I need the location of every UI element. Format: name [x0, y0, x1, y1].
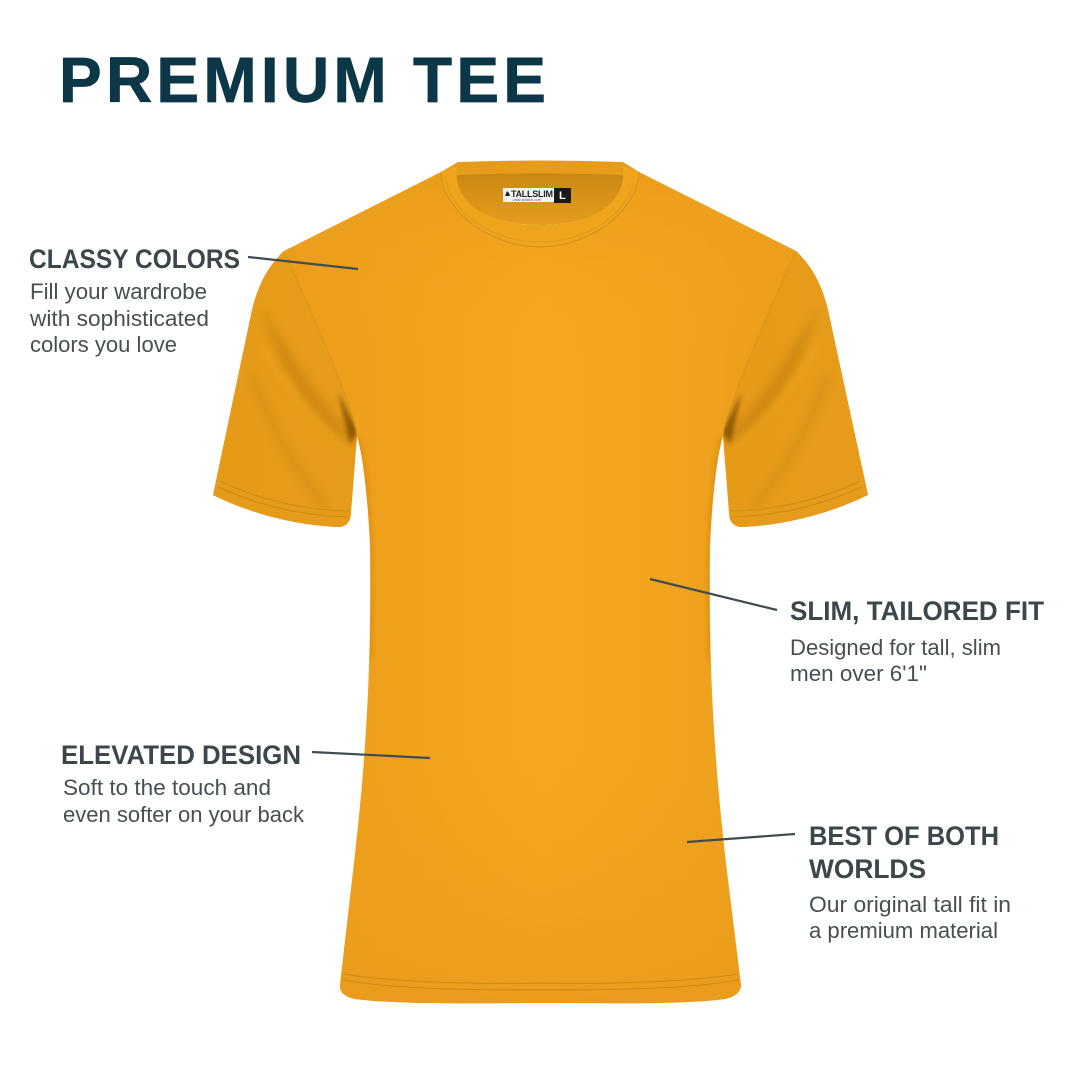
callout: slim, tailored fit — [650, 579, 1044, 686]
heading: elevated design: ELEVATED DESIGN — [61, 740, 301, 770]
heading: classy colors: CLASSY COLORS — [29, 244, 240, 274]
heading: best of both worlds — [809, 821, 999, 884]
leader line: slim fit — [650, 579, 777, 610]
text: slim fit: Designed for tall, slim — [790, 635, 1001, 660]
callout: elevated design — [61, 740, 430, 827]
callout: best of both worlds — [687, 821, 1011, 943]
leader line: classy colors — [248, 257, 358, 269]
text: best of both worlds: a premium material — [809, 918, 998, 943]
text: elevated design: even softer on your back — [63, 802, 305, 827]
text: classy colors: Fill your wardrobe — [30, 279, 207, 304]
title: PREMIUM TEE — [59, 44, 550, 116]
heading: best of both worlds: WORLDS — [809, 854, 926, 884]
shirt: sleeve seams and hems — [218, 254, 862, 990]
text: elevated design — [63, 775, 305, 827]
text: classy colors: colors you love — [30, 332, 177, 357]
heading: slim fit: SLIM, TAILORED FIT — [790, 596, 1044, 626]
shirt: left sleeve shading — [213, 251, 357, 527]
text: elevated design: Soft to the touch and — [63, 775, 271, 800]
text: classy colors — [29, 279, 209, 357]
heading: best of both worlds: BEST OF BOTH — [809, 821, 999, 851]
shirt: neck label — [503, 188, 571, 203]
text: slim fit: men over 6'1" — [790, 661, 927, 686]
t-shirt — [200, 160, 880, 1003]
text: slim fit — [790, 635, 1001, 686]
shirt: collar ribbing — [441, 166, 639, 247]
shirt: back collar — [441, 160, 639, 200]
shirt: inner neck — [457, 174, 623, 225]
shirt: body — [213, 172, 868, 1003]
shirt: neck label: L — [559, 190, 566, 202]
leader line: best of both worlds — [687, 834, 795, 842]
shirt: neck label: TALLSLIM — [511, 189, 553, 199]
shirt: neck label: www.tallslim.com — [513, 198, 541, 202]
shirt: right sleeve shading — [723, 251, 868, 527]
callout: classy colors — [29, 244, 358, 357]
text: best of both worlds: Our original tall fit in — [809, 892, 1011, 917]
text: best of both worlds — [809, 892, 1011, 943]
leader line: elevated design — [312, 752, 430, 758]
shirt: side edge shading — [357, 436, 723, 660]
text: classy colors: with sophisticated — [29, 306, 209, 331]
